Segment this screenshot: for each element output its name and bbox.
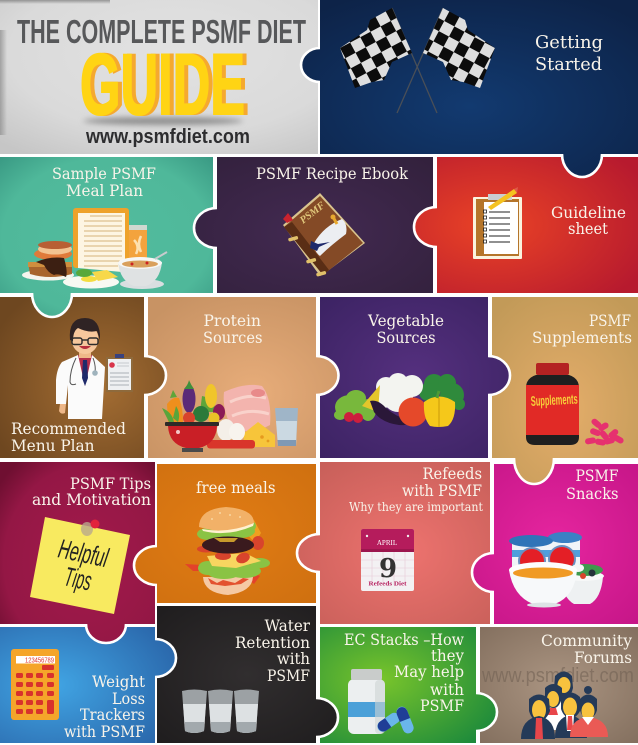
heading: weight loss trackers: Loss [112, 690, 145, 708]
heading: EC stacks [344, 631, 465, 715]
heading: menu plan: Menu Plan [11, 437, 95, 455]
heading: menu plan: Recommended [11, 420, 126, 438]
icon: helpful tips sticky note: Tips [62, 562, 94, 596]
heading: EC stacks: they [431, 647, 464, 665]
heading: water retention [235, 617, 311, 685]
website: www.psmfdiet.com [85, 126, 250, 148]
heading: getting started: Started [535, 54, 602, 75]
heading: weight loss trackers: Trackers [80, 706, 145, 724]
heading: tips and motivation: and Motivation [32, 491, 151, 509]
icon: vegetables [334, 373, 465, 427]
panel: PSMF snacks [472, 464, 638, 624]
title line: THE COMPLETE PSMF DIET [17, 13, 306, 50]
heading: supplements [532, 312, 632, 347]
heading: community forums: Forums [574, 649, 632, 667]
panel: protein sources [148, 297, 338, 458]
heading: vegetable sources: Sources [376, 329, 436, 347]
panel: vegetable sources [320, 297, 510, 458]
heading: weight loss trackers: Weight [92, 673, 146, 691]
panel: getting started [301, 0, 638, 177]
heading: EC stacks: with [430, 681, 464, 699]
heading: vegetable sources: Vegetable [367, 312, 444, 330]
heading: getting started: Getting [535, 32, 603, 53]
icon: calendar: APRIL [377, 539, 397, 547]
icon: doctor with clipboard [56, 318, 133, 419]
panel: weight loss trackers [0, 627, 176, 743]
heading: supplements: Supplements [532, 329, 632, 347]
panel: PSMF tips and motivation [0, 462, 155, 643]
icon: helpful tips sticky note [30, 517, 130, 614]
icon: clipboard checklist [473, 187, 522, 259]
panel: refeeds with PSMF [297, 462, 490, 624]
panel: sample meal plan [0, 157, 213, 317]
heading: refeeds: Why they are important [349, 500, 483, 514]
icon: three glasses of water [182, 690, 259, 733]
heading: supplements: PSMF [589, 312, 631, 330]
panel: recipe ebook [194, 157, 433, 293]
icon: supplement bottle [526, 363, 579, 445]
panel: free meals [134, 464, 316, 603]
icon: calendar [361, 529, 414, 591]
heading: weight loss trackers [64, 673, 146, 741]
title word: guide [80, 37, 249, 133]
heading: protein sources: Sources [203, 329, 263, 347]
heading: guideline sheet: sheet [568, 220, 609, 238]
heading: recipe ebook: PSMF Recipe Ebook [256, 165, 409, 183]
heading: water retention: PSMF [267, 667, 310, 685]
heading: protein sources: Protein [204, 312, 261, 330]
icon: pill bottle and capsules [348, 669, 415, 735]
heading: community forums [541, 632, 632, 667]
heading: protein sources [203, 312, 263, 347]
heading: weight loss trackers: with PSMF [64, 723, 145, 741]
heading: EC stacks: PSMF [420, 697, 464, 715]
icon: helpful tips sticky note: Helpful [56, 534, 111, 573]
icon: group of people [521, 672, 608, 739]
heading: refeeds [349, 465, 483, 514]
heading: water retention: Water [264, 617, 311, 635]
panel: community forums [480, 627, 638, 743]
heading: EC stacks: May help [394, 663, 464, 681]
title word: guide: GUIDE [80, 37, 245, 133]
heading: sample meal plan: Meal Plan [66, 182, 143, 200]
heading: snacks: PSMF [576, 467, 619, 485]
panel: EC stacks [320, 627, 497, 743]
icon: calculator: 123456789 [25, 658, 54, 664]
heading: refeeds: Refeeds [422, 465, 482, 483]
heading: EC stacks: EC Stacks –How [344, 631, 465, 649]
heading: menu plan [11, 420, 126, 455]
heading: sample meal plan [52, 165, 156, 200]
icon: crossed checkered flags [340, 8, 495, 113]
icon: protein foods [162, 380, 298, 452]
heading: snacks: Snacks [566, 485, 619, 503]
heading: getting started [535, 32, 603, 75]
icon: calendar: 9 [379, 554, 397, 584]
heading: tips and motivation: PSMF Tips [70, 475, 151, 493]
panel: recommended menu plan [0, 297, 166, 458]
heading: vegetable sources [367, 312, 444, 347]
icon: meal plan and food [22, 208, 167, 289]
icon: snack cans and bowls [509, 532, 604, 608]
heading: guideline sheet: Guideline [551, 204, 626, 222]
panel: water retention [157, 606, 338, 743]
title word: guide: GUIDE [84, 37, 249, 133]
panel: title header [0, 0, 318, 154]
icon: recipe book: PSMF [298, 200, 327, 226]
icon: calculator [11, 649, 59, 720]
heading: water retention: Retention [235, 634, 310, 652]
heading: guideline sheet [551, 204, 626, 238]
icon: burger [185, 507, 270, 595]
icon: supplement bottle: Supplements [530, 391, 578, 409]
heading: sample meal plan: Sample PSMF [52, 165, 156, 183]
icon: recipe book [283, 193, 365, 277]
heading: free meals: free meals [196, 479, 276, 497]
heading: community forums: Community [541, 632, 632, 650]
heading: snacks [566, 467, 619, 503]
icon: calendar: Refeeds Diet [368, 580, 407, 588]
heading: water retention: with [277, 650, 310, 668]
heading: tips and motivation [32, 475, 151, 509]
panel: PSMF supplements [492, 297, 638, 484]
icon: pink pills [585, 417, 625, 446]
heading: refeeds: with PSMF [402, 482, 482, 500]
panel: guideline sheet [414, 157, 638, 293]
